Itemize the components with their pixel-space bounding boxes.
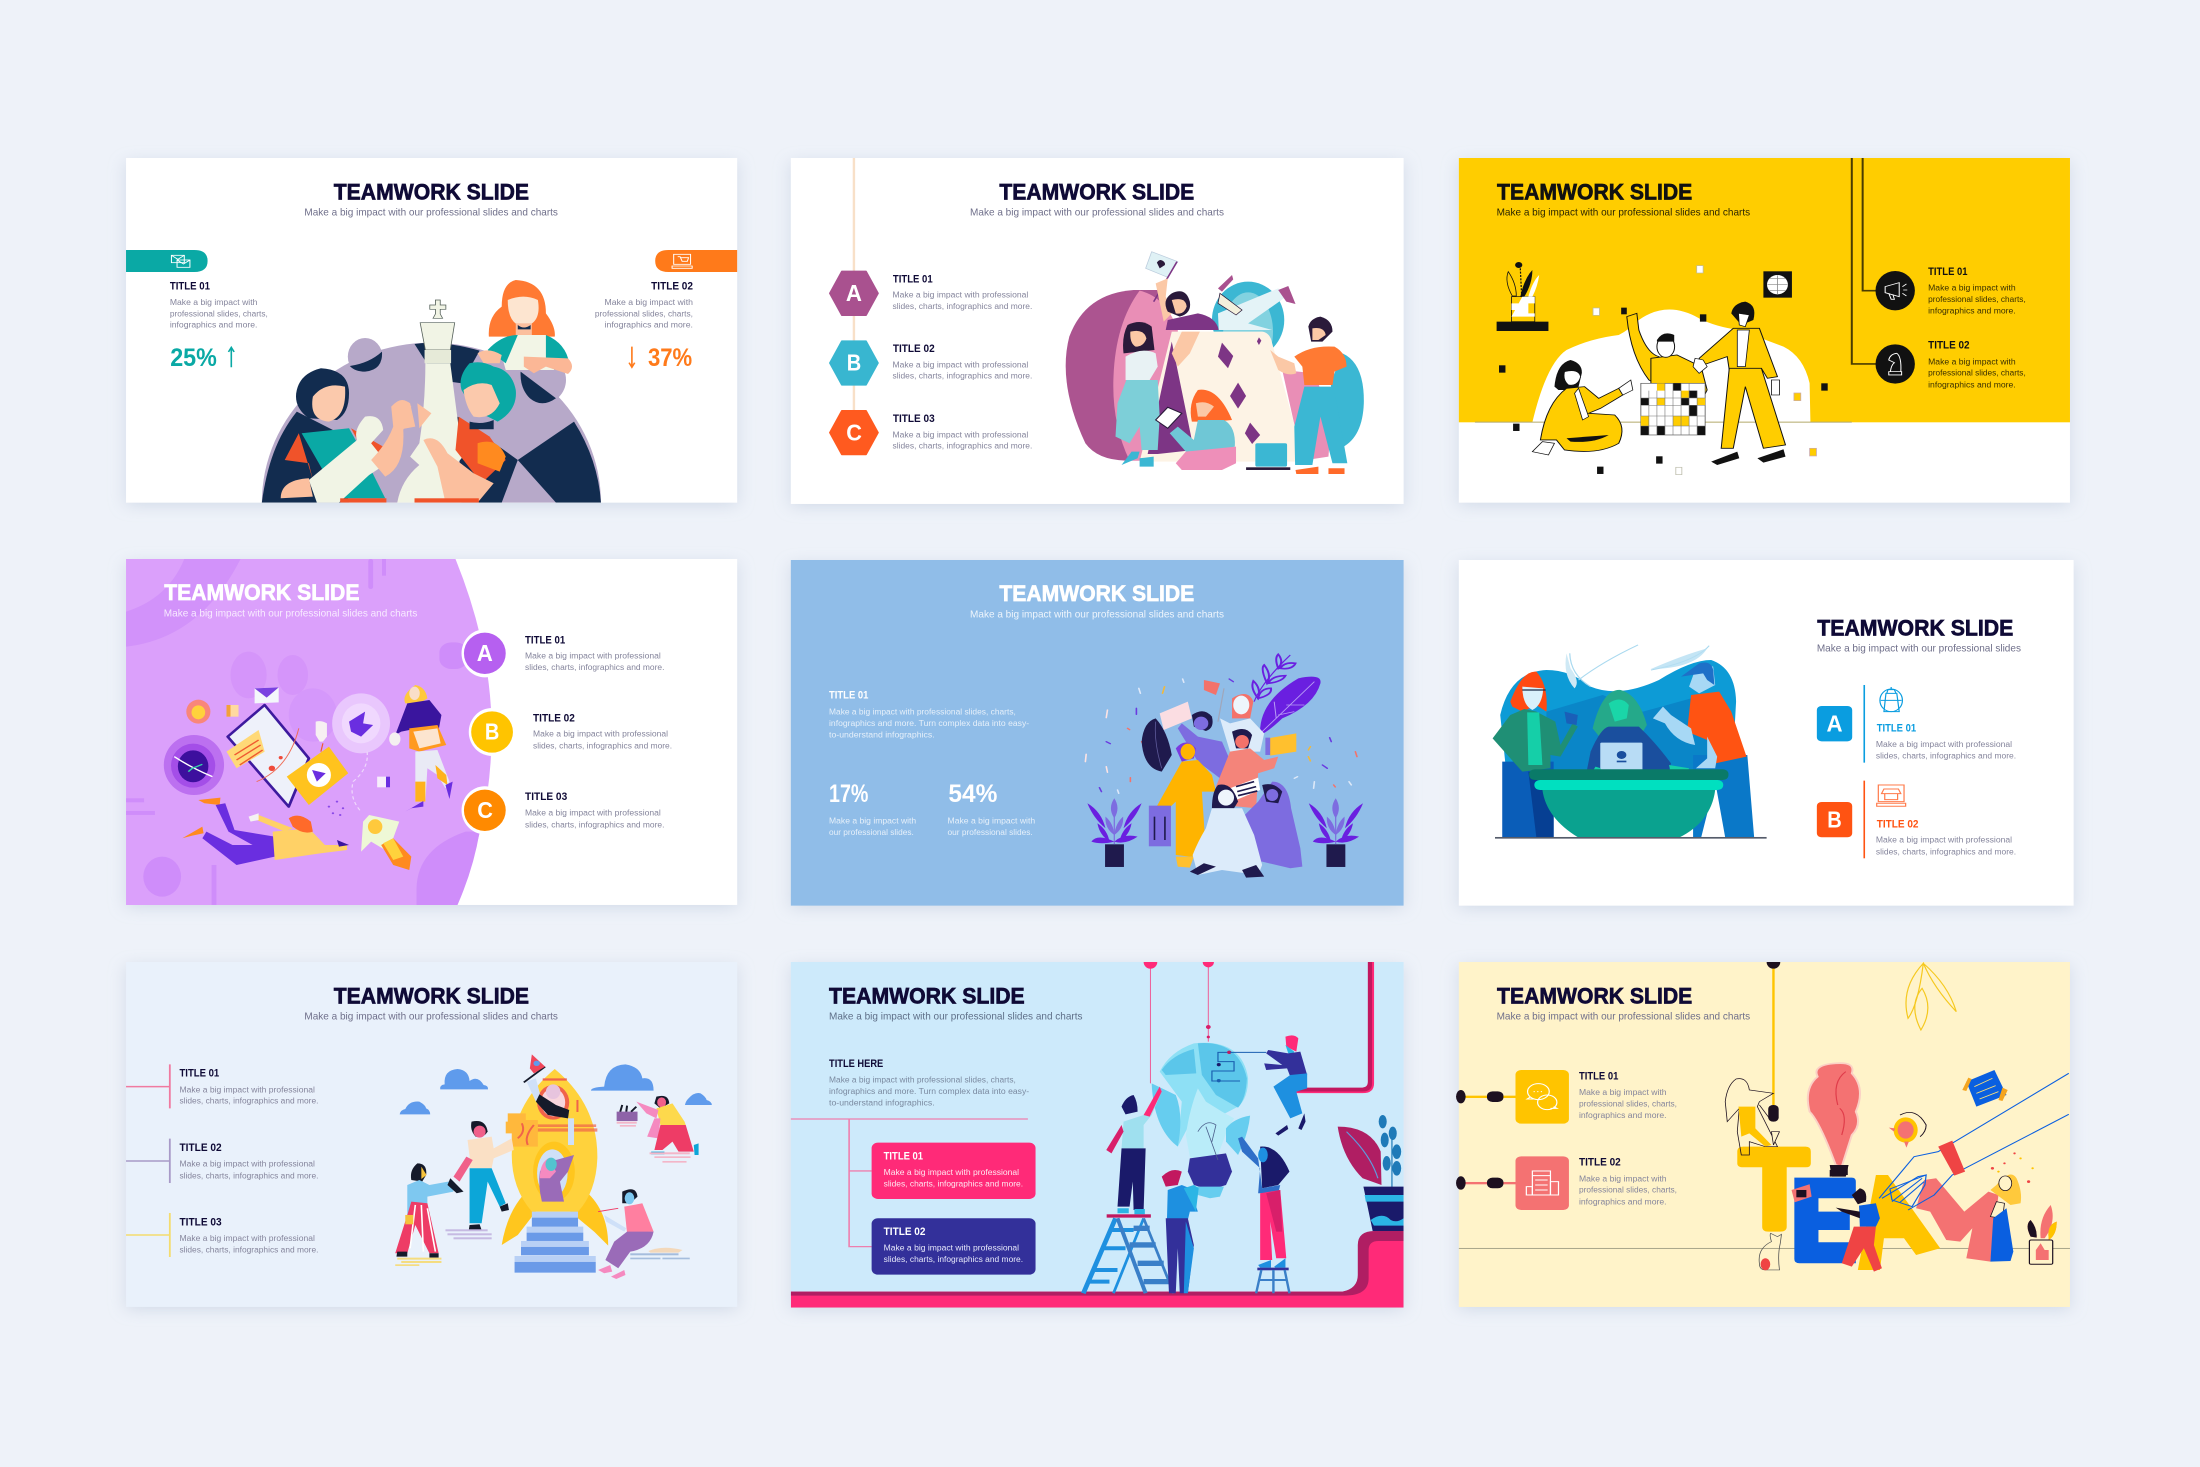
text block: title 01: TITLE 01	[525, 633, 566, 646]
illustration: light bulb team	[791, 962, 1404, 1308]
badge A: A	[1826, 712, 1843, 737]
text block: title 02: TITLE 02	[1877, 817, 1919, 830]
text block: title 01: infographics and more.	[1579, 1111, 1667, 1120]
text block: title 01: slides, charts, infographics and more.	[1876, 751, 2016, 760]
text block: title 02: slides, charts, infographics and more.	[1876, 847, 2016, 856]
text block: title 01: Make a big impact with professional	[1876, 740, 2012, 749]
slide background	[791, 158, 1404, 504]
panel: light bulb slide	[791, 962, 1404, 1308]
card: title 01	[872, 1143, 1036, 1199]
text block: title 01	[525, 633, 664, 672]
text block: title 02: TITLE 02	[533, 712, 575, 724]
slide background	[791, 962, 1404, 1308]
panel: chess slide	[126, 158, 737, 503]
text block: title 01: Make a big impact with	[1928, 283, 2016, 292]
badge B: B	[1827, 808, 1842, 833]
illustration: TEAM letters	[1725, 962, 2069, 1272]
text block: title 03: slides, charts, infographics and more.	[179, 1245, 318, 1254]
purple curved background	[126, 559, 492, 905]
card: title 02: TITLE 02	[884, 1225, 926, 1238]
text block: title 03: slides, charts, infographics and more.	[525, 820, 664, 829]
heading: TEAMWORK SLIDE	[999, 180, 1194, 205]
subtitle: Make a big impact with our professional slides and charts	[304, 1011, 558, 1022]
text block: title 01: professional slides, charts,	[170, 309, 268, 318]
connector: purple	[126, 1139, 170, 1183]
heading: TEAMWORK SLIDE	[1497, 984, 1692, 1009]
card: title 01: Make a big impact with professional	[884, 1168, 1019, 1177]
heading: TEAMWORK SLIDE	[829, 984, 1025, 1009]
subtitle: Make a big impact with our professional slides and charts	[970, 610, 1224, 620]
text block: title 02: Make a big impact with	[1928, 357, 2016, 366]
text block: title 01: infographics and more.	[170, 320, 257, 329]
connector line	[853, 158, 855, 411]
text block: title 01: TITLE 01	[1928, 265, 1968, 278]
stat: 17 percent: Make a big impact with	[829, 816, 916, 825]
text block: title here: to-understand infographics.	[829, 1098, 935, 1107]
text block: title 02: TITLE 02	[1928, 339, 1970, 351]
icon: calculator	[1515, 1156, 1569, 1210]
text block: title 01: Make a big impact with professional	[179, 1085, 315, 1094]
stat: 54 percent	[948, 779, 1035, 837]
text block: title 02: Make a big impact with professional	[179, 1159, 315, 1168]
text block: title 02	[1928, 339, 2026, 389]
stat: 17 percent: our professional slides.	[829, 828, 914, 837]
slide background	[791, 560, 1404, 906]
badge C: C	[846, 420, 862, 446]
text block: title 02: TITLE 02	[1579, 1156, 1621, 1168]
text block: title 01: slides, charts, infographics and more.	[179, 1096, 318, 1105]
text block: title 02	[533, 712, 672, 750]
text block: title 02: Make a big impact with professional	[533, 729, 668, 738]
illustration: chess team	[262, 280, 601, 503]
connector: pink	[126, 1064, 170, 1108]
stat: 17 percent	[829, 779, 916, 837]
badge B: B	[485, 720, 499, 745]
text block: title 01: slides, charts, infographics and more.	[525, 663, 664, 672]
text block: title 01: TITLE 01	[893, 272, 933, 285]
text block: title 01: professional slides, charts,	[1579, 1099, 1677, 1108]
illustration: digital floating team	[164, 685, 453, 870]
panel: TEAM letters slide	[1456, 962, 2070, 1307]
slide background	[126, 559, 737, 905]
subtitle: Make a big impact with our professional slides and charts	[829, 1011, 1083, 1022]
panel: purple slide	[126, 559, 737, 905]
text block: title 01: Make a big impact with professional	[893, 290, 1028, 299]
text block: title 01	[1579, 1069, 1677, 1120]
white blob	[1532, 310, 1810, 422]
stat: 54 percent: Make a big impact with	[948, 816, 1035, 825]
card: title 02	[872, 1218, 1036, 1275]
slide background	[1459, 962, 2070, 1307]
text block: title 02: Make a big impact with	[605, 298, 693, 307]
ground line	[1475, 421, 1852, 424]
illustration: rocket team	[395, 1054, 712, 1279]
text block: title 02	[1579, 1156, 1677, 1206]
text block: title 01: TITLE 01	[179, 1067, 220, 1079]
text block: title 02: Make a big impact with professional	[893, 360, 1028, 369]
ground line	[1459, 1247, 2070, 1250]
stat: 25 percent up: 25%	[170, 343, 217, 371]
connector lines	[1852, 158, 1876, 364]
heading: TEAMWORK SLIDE	[164, 581, 359, 605]
text block: title 02	[179, 1141, 318, 1180]
text block: title 03: TITLE 03	[179, 1215, 222, 1228]
panel: hexagon slide	[791, 158, 1404, 504]
stat: 17 percent: 17%	[829, 779, 868, 807]
stat: 37 percent down	[629, 343, 692, 371]
text block: title 02: infographics and more.	[1928, 380, 2016, 389]
text block: title 03: Make a big impact with professional	[525, 808, 661, 817]
text block: title 02: slides, charts, infographics and more.	[533, 741, 672, 750]
text block: title 02: Make a big impact with professional	[1876, 835, 2012, 844]
text block: title 01: TITLE 01	[1877, 722, 1916, 734]
badge A	[830, 271, 878, 315]
card: title 01: TITLE 01	[884, 1149, 923, 1162]
text block: title 01	[179, 1067, 318, 1105]
panel: white team slide	[1459, 560, 2074, 906]
heading: TEAMWORK SLIDE	[999, 582, 1194, 606]
subtitle: Make a big impact with our professional slides and charts	[1497, 1011, 1750, 1022]
connector lines	[791, 1119, 1028, 1247]
text block: title 01: Make a big impact with professional	[525, 651, 661, 660]
text block: title 03	[179, 1215, 318, 1254]
heading: TEAMWORK SLIDE	[1497, 180, 1692, 205]
text block: title 01: to-understand infographics.	[829, 730, 935, 739]
slide background	[126, 158, 737, 503]
subtitle: Make a big impact with our professional slides and charts	[304, 208, 558, 218]
badge A: A	[846, 281, 862, 306]
text block: title 02: TITLE 02	[893, 342, 935, 355]
slide background	[1459, 158, 2070, 503]
icon: orange cart tab	[655, 250, 737, 272]
card: title 02: Make a big impact with professional	[884, 1243, 1019, 1252]
text block: title 01: TITLE 01	[1579, 1069, 1619, 1082]
illustration: puzzle team	[1497, 262, 1828, 475]
panel: rocket slide	[126, 962, 737, 1307]
text block: title 02: infographics and more.	[1579, 1197, 1667, 1206]
text block: title 01: TITLE 01	[829, 689, 869, 701]
text block: title 03: TITLE 03	[525, 790, 568, 803]
heading: TEAMWORK SLIDE	[334, 180, 529, 205]
text block: title 01: slides, charts, infographics and more.	[893, 302, 1032, 311]
slide background	[1459, 560, 2074, 906]
heading: TEAMWORK SLIDE	[334, 984, 529, 1009]
illustration: celebrating team	[1085, 654, 1363, 878]
slide background	[126, 962, 737, 1307]
badge B	[830, 341, 878, 385]
icon: megaphone badge	[1876, 271, 1915, 310]
badge A	[1817, 706, 1852, 741]
illustration: playing card team	[1066, 252, 1364, 474]
divider: blue	[1863, 685, 1865, 763]
subtitle: Make a big impact with our professional slides and charts	[970, 208, 1224, 218]
text block: title here	[829, 1057, 1029, 1107]
text block: title 02	[893, 342, 1032, 380]
text block: title 01: professional slides, charts,	[1928, 295, 2026, 304]
text block: title here: TITLE HERE	[829, 1057, 883, 1070]
text block: title 03: Make a big impact with professional	[893, 430, 1028, 439]
panel: yellow slide	[1459, 158, 2070, 503]
text block: title 03	[525, 790, 664, 829]
background shapes	[126, 559, 480, 905]
yellow band	[1459, 158, 2070, 422]
text block: title 02: professional slides, charts,	[1579, 1185, 1677, 1194]
text block: title here: infographics and more. Turn complex data into easy-	[829, 1087, 1029, 1096]
divider: orange	[1863, 781, 1865, 858]
badge C: C	[477, 798, 493, 823]
icon: lantern	[1880, 687, 1902, 712]
icon: teal mail tab	[126, 250, 208, 272]
panel: blue slide	[791, 560, 1404, 906]
text block: title 02: TITLE 02	[179, 1141, 222, 1154]
text block: title 01: Make a big impact with	[1579, 1088, 1667, 1097]
text block: title 01: TITLE 01	[170, 279, 210, 292]
badge A: A	[477, 641, 493, 666]
stat: 37 percent down: 37%	[648, 343, 692, 371]
icon: online shop	[1877, 785, 1906, 806]
card: title 02: slides, charts, infographics and more.	[884, 1255, 1023, 1264]
text block: title 03	[893, 412, 1032, 450]
text block: title 01	[1876, 722, 2016, 760]
text block: title 02: professional slides, charts,	[1928, 368, 2026, 377]
connector: coral node	[1456, 1176, 1516, 1190]
badge C	[462, 786, 508, 834]
text block: title 02	[595, 279, 693, 329]
badge C	[830, 411, 878, 455]
text block: title 01	[893, 272, 1032, 311]
badge B: B	[847, 351, 861, 376]
subtitle: Make a big impact with our professional slides and charts	[164, 609, 418, 619]
stat: 54 percent: our professional slides.	[948, 828, 1033, 837]
badge B	[1817, 802, 1852, 837]
text block: title 03: TITLE 03	[893, 412, 935, 425]
card: title 01: slides, charts, infographics and more.	[884, 1179, 1023, 1188]
connector: yellow node	[1456, 1090, 1516, 1103]
text block: title 02: TITLE 02	[651, 279, 693, 292]
text block: title 03: Make a big impact with professional	[179, 1234, 315, 1243]
text block: title 01	[829, 689, 1029, 739]
text block: title 02	[1876, 817, 2016, 856]
text block: title 01: Make a big impact with	[170, 298, 257, 307]
stat: 54 percent: 54%	[948, 779, 997, 807]
text block: title 01: Make a big impact with professional slides, charts,	[829, 707, 1016, 716]
text block: title 02: Make a big impact with	[1579, 1174, 1667, 1183]
text block: title 01: infographics and more.	[1928, 306, 2016, 315]
text block: title 02: slides, charts, infographics and more.	[179, 1171, 318, 1180]
text block: title 01: infographics and more. Turn complex data into easy-	[829, 719, 1029, 728]
text block: title 01	[170, 279, 268, 329]
text block: title 03: slides, charts, infographics and more.	[893, 441, 1032, 450]
icon: chess knight badge	[1876, 344, 1915, 384]
illustration: laptop meeting	[1493, 645, 1767, 839]
icon: chat bubbles	[1515, 1070, 1569, 1124]
text block: title here: Make a big impact with professional slides, charts,	[829, 1075, 1016, 1084]
text block: title 01	[1928, 265, 2026, 315]
subtitle: Make a big impact with our professional slides and charts	[1497, 208, 1750, 218]
text block: title 02: professional slides, charts,	[595, 309, 693, 318]
badge A	[462, 629, 508, 677]
subtitle: Make a big impact with our professional slides	[1817, 644, 2021, 654]
badge B	[469, 708, 515, 756]
text block: title 02: slides, charts, infographics and more.	[893, 371, 1032, 380]
connector: yellow	[126, 1213, 170, 1257]
text block: title 02: infographics and more.	[605, 320, 693, 329]
heading: TEAMWORK SLIDE	[1817, 616, 2013, 641]
